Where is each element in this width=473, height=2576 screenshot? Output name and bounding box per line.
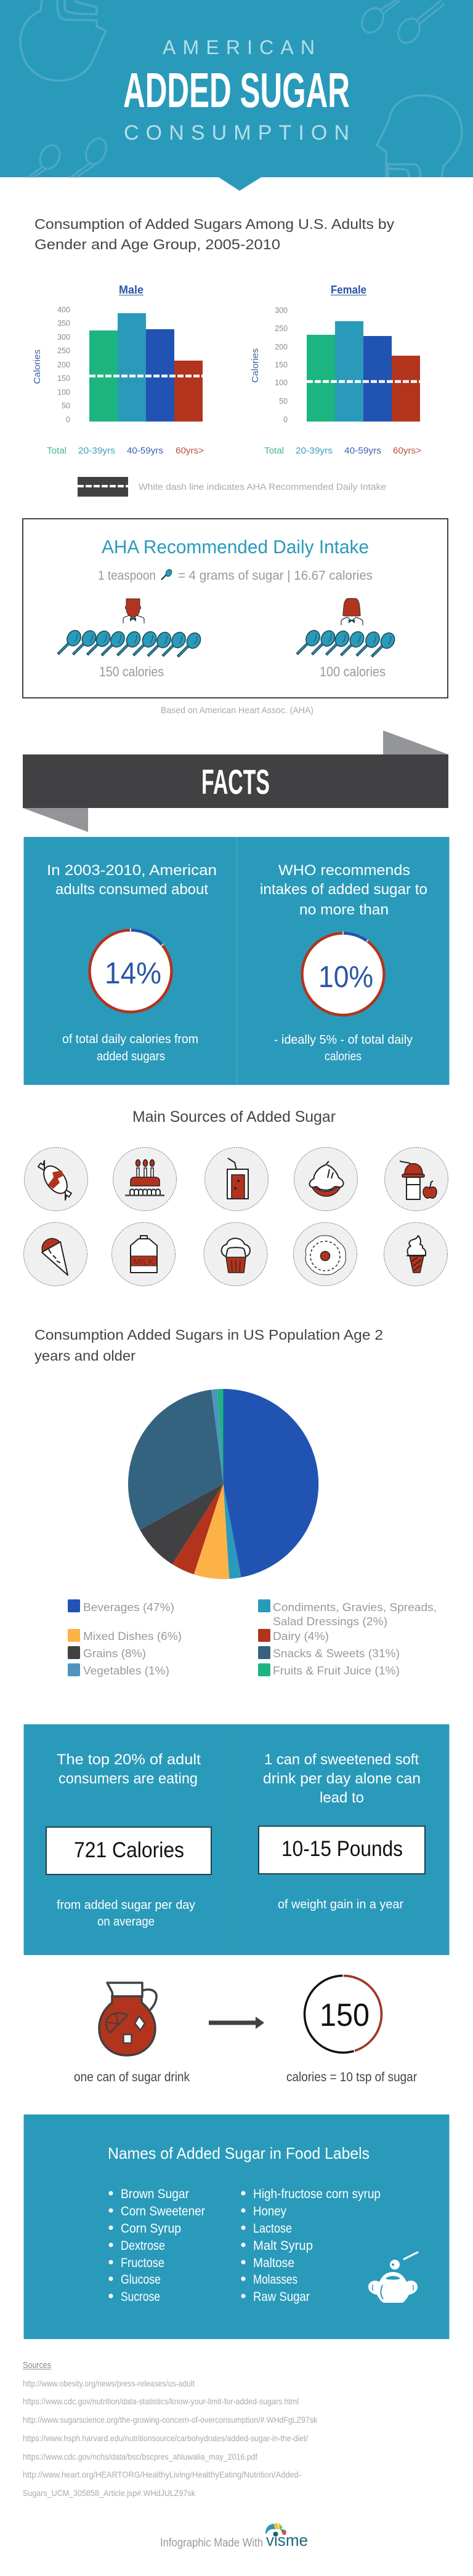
left caption: from added sugar per day	[57, 1898, 195, 1912]
footer: made with visme	[160, 2523, 308, 2550]
list: right column: Lactose	[253, 2222, 292, 2236]
label: 100 calories: 100 calories	[320, 664, 386, 679]
bar chart: male: 300	[57, 333, 70, 342]
list: right column: Raw Sugar	[253, 2290, 310, 2304]
right intro text: no more than	[299, 902, 389, 918]
callout: 721 calories	[46, 1827, 211, 1874]
bar chart: female: 100	[275, 378, 288, 387]
bar chart: female: 60yrs>	[393, 446, 421, 456]
teaspoon equivalence	[98, 569, 373, 583]
heading: consumption by gender and age: Gender and Age Group, 2005-2010	[34, 236, 280, 252]
left caption: on average	[97, 1915, 155, 1929]
heading: AHA recommended: AHA Recommended Daily Intake	[102, 536, 369, 558]
icon: dessert	[294, 1147, 357, 1211]
icon: ice cream cone	[384, 1222, 447, 1286]
bar chart: male	[32, 284, 204, 456]
callout: 721 calories: 721 Calories	[74, 1838, 184, 1862]
donut: 14 percent: 14%	[105, 957, 161, 990]
bar chart: male: 60yrs>	[176, 446, 204, 456]
bar chart: female: 150	[275, 361, 288, 369]
bar chart: male: 350	[57, 319, 70, 327]
bar chart: female: Total	[264, 446, 284, 456]
heading: main sources: Main Sources of Added Sugar	[132, 1108, 336, 1126]
icon: sugar bowl and spoon	[368, 2252, 418, 2303]
donut: 14 percent	[90, 928, 171, 1012]
legend: white dash line	[78, 477, 386, 497]
bar chart: male: 200	[57, 361, 70, 369]
pie chart: added sugar sources	[128, 1389, 318, 1579]
bar chart: male: 100	[57, 388, 70, 396]
icon: muffin	[204, 1222, 267, 1286]
right caption	[274, 1033, 413, 1063]
list: right column: Honey	[253, 2204, 286, 2218]
list: right column: Malt Syrup	[253, 2239, 313, 2253]
pie legend: Mixed Dishes (6%)	[83, 1630, 182, 1642]
icon: birthday cake	[113, 1147, 176, 1211]
bar chart: male: 400	[57, 305, 70, 314]
icon: woman	[341, 598, 363, 625]
list: left column: Glucose	[121, 2273, 161, 2287]
sources list: Sources	[23, 2360, 51, 2370]
panel: AHA recommended daily intake	[23, 519, 448, 698]
teaspoon equivalence: = 4 grams of sugar | 16.67 calories	[178, 569, 373, 583]
header banner	[0, 0, 473, 191]
pie legend: Condiments, Gravies, Spreads,	[273, 1601, 437, 1614]
note: based on AHA: Based on American Heart Assoc. (AHA)	[161, 705, 313, 716]
heading: consumption US population: years and older	[34, 1348, 135, 1364]
sources list: Sugars_UCM_305858_Article.jsp#.WHdJULZ97sk	[23, 2488, 196, 2498]
right intro text	[263, 1751, 421, 1806]
bar chart: female: 200	[275, 343, 288, 351]
sources list: https://www.cdc.gov/nchs/data/bsc/bscpres_ahluwalia_may_2016.pdf	[23, 2452, 257, 2462]
right caption: calories	[325, 1050, 362, 1063]
icon: nine spoons	[58, 628, 203, 657]
bar chart: female: Female	[331, 284, 366, 296]
icon: head outline right	[377, 95, 462, 177]
list: left column	[108, 2187, 205, 2304]
circle: 150 calories: 150	[320, 1998, 370, 2033]
heading: consumption US population	[34, 1327, 383, 1364]
left caption: added sugars	[97, 1050, 165, 1063]
panel: names of added sugar	[23, 2114, 450, 2339]
icon: sugar drink jug	[99, 1983, 156, 2055]
left caption: of total daily calories from	[62, 1033, 198, 1046]
right intro text: intakes of added sugar to	[260, 881, 427, 898]
bar chart: female: 50	[279, 397, 288, 406]
bar chart: male: Male	[119, 284, 144, 296]
bar chart: male: 150	[57, 374, 70, 383]
icon: six spoons	[297, 628, 397, 657]
pie legend: Fruits & Fruit Juice (1%)	[273, 1665, 400, 1677]
panel heading: Names of Added Sugar in Food Labels	[108, 2144, 370, 2162]
list: left column: Corn Syrup	[121, 2222, 181, 2236]
bar chart: male: 250	[57, 346, 70, 355]
right caption: - ideally 5% - of total daily	[274, 1033, 413, 1047]
left intro text: consumers are eating	[59, 1770, 198, 1787]
icon: head outline left	[20, 0, 106, 81]
bar chart: female: Calories	[250, 348, 261, 383]
pie legend: Beverages (47%)	[83, 1601, 174, 1614]
title line: Consumption: CONSUMPTION	[124, 121, 349, 145]
left intro text: adults consumed about	[55, 881, 208, 898]
right intro text: WHO recommends	[278, 862, 410, 879]
list: right column	[241, 2187, 381, 2304]
pie legend: Grains (8%)	[83, 1647, 146, 1660]
list: left column: Fructose	[121, 2256, 164, 2270]
pie legend: Snacks & Sweets (31%)	[273, 1647, 400, 1660]
facts ribbon banner: FACTS	[201, 762, 270, 802]
icon: milk bottle: MILK	[133, 1257, 155, 1266]
right intro text: drink per day alone can	[263, 1770, 421, 1787]
callout: 10-15 pounds: 10-15 Pounds	[281, 1837, 403, 1861]
list: left column: Sucrose	[121, 2290, 160, 2304]
icon: smoothie and apple	[384, 1147, 448, 1211]
left intro text: The top 20% of adult	[57, 1751, 201, 1768]
bar chart: male: 20-39yrs	[78, 446, 115, 456]
list: right column: Maltose	[253, 2256, 294, 2270]
bar chart: male: 40-59yrs	[127, 446, 163, 456]
pie legend	[68, 1599, 437, 1677]
icon: milk bottle	[112, 1222, 175, 1286]
teaspoon equivalence: 1 teaspoon	[98, 569, 156, 583]
icon: candy	[25, 1147, 87, 1211]
list: right column: Molasses	[253, 2273, 297, 2287]
icon: visme logo	[265, 2523, 286, 2537]
bar chart: female: 250	[275, 324, 288, 333]
list: right column: High-fructose corn syrup	[253, 2187, 381, 2201]
bar chart: female: 0	[283, 415, 288, 424]
pie legend: Dairy (4%)	[273, 1630, 329, 1642]
icon: spoons top right	[358, 0, 445, 47]
sources list	[23, 2360, 318, 2498]
list: left column: Corn Sweetener	[121, 2204, 205, 2218]
sources list: https://www.hsph.harvard.edu/nutritionsource/carbohydrates/added-sugar-in-the-diet/	[23, 2433, 308, 2443]
icon: plate	[293, 1222, 357, 1286]
right intro text	[260, 862, 427, 918]
heading: consumption by gender and age	[34, 216, 395, 252]
list: left column: Brown Sugar	[121, 2187, 189, 2201]
sources list: http://www.heart.org/HEARTORG/HealthyLiving/HealthyEating/Nutrition/Added-	[23, 2470, 301, 2479]
title line: American: AMERICAN	[163, 36, 315, 58]
right caption: of weight gain in a year	[278, 1898, 403, 1911]
sources list: https://www.cdc.gov/nutrition/data-statistics/know-your-limit-for-added-sugars.html	[23, 2396, 299, 2406]
bar chart: female: 40-59yrs	[344, 446, 381, 456]
bar chart: female: 300	[275, 306, 288, 315]
sources list: http://www.sugarscience.org/the-growing-concern-of-overconsumption/#.WHdFgLZ97sk	[23, 2415, 318, 2425]
left intro text	[57, 1751, 201, 1787]
left intro text	[47, 862, 217, 898]
bar chart: male: Total	[47, 446, 67, 456]
caption: one can of sugar drink: one can of sugar drink	[74, 2070, 190, 2084]
icon: spoons bottom left	[28, 135, 110, 177]
sources list: http://www.obesity.org/news/press-releases/us-adult	[23, 2378, 195, 2388]
bar chart: male: 0	[66, 415, 70, 424]
right intro text: 1 can of sweetened soft	[264, 1751, 419, 1768]
icon: snow cone	[23, 1222, 87, 1286]
icon: man	[123, 599, 144, 623]
pie legend: Salad Dressings (2%)	[273, 1615, 387, 1628]
right intro text: lead to	[320, 1790, 364, 1806]
left intro text: In 2003-2010, American	[47, 862, 217, 879]
footer: made with visme: Infographic Made With	[160, 2537, 263, 2550]
arrow	[209, 2017, 264, 2029]
donut: 10 percent	[302, 932, 384, 1015]
legend: white dash line: White dash line indicates AHA Recommended Daily Intake	[139, 482, 386, 492]
caption: calories equals teaspoons: calories = 10 tsp of sugar	[286, 2070, 417, 2084]
callout: 10-15 pounds	[259, 1826, 425, 1874]
footer: made with visme: visme	[266, 2531, 308, 2550]
bar chart: female: 20-39yrs	[296, 446, 333, 456]
heading: consumption by gender and age: Consumption of Added Sugars Among U.S. Adults by	[34, 216, 395, 232]
list: left column: Dextrose	[121, 2239, 165, 2253]
circle: 150 calories	[304, 1974, 382, 2053]
heading: consumption US population: Consumption Added Sugars in US Population Age 2	[34, 1327, 383, 1343]
donut: 10 percent: 10%	[318, 961, 373, 994]
left caption	[57, 1898, 195, 1929]
panel: top consumers and soft drinks	[23, 1724, 450, 1955]
pie legend: Vegetables (1%)	[83, 1665, 169, 1677]
facts ribbon banner	[23, 730, 448, 832]
bar chart: male: 50	[62, 401, 70, 410]
icon: soft drink	[204, 1147, 269, 1211]
left caption	[62, 1033, 198, 1063]
bar chart: male: Calories	[32, 350, 42, 384]
panel: facts statistics	[23, 837, 450, 1085]
label: 150 calories: 150 calories	[99, 664, 164, 679]
bar chart: female	[250, 284, 421, 456]
